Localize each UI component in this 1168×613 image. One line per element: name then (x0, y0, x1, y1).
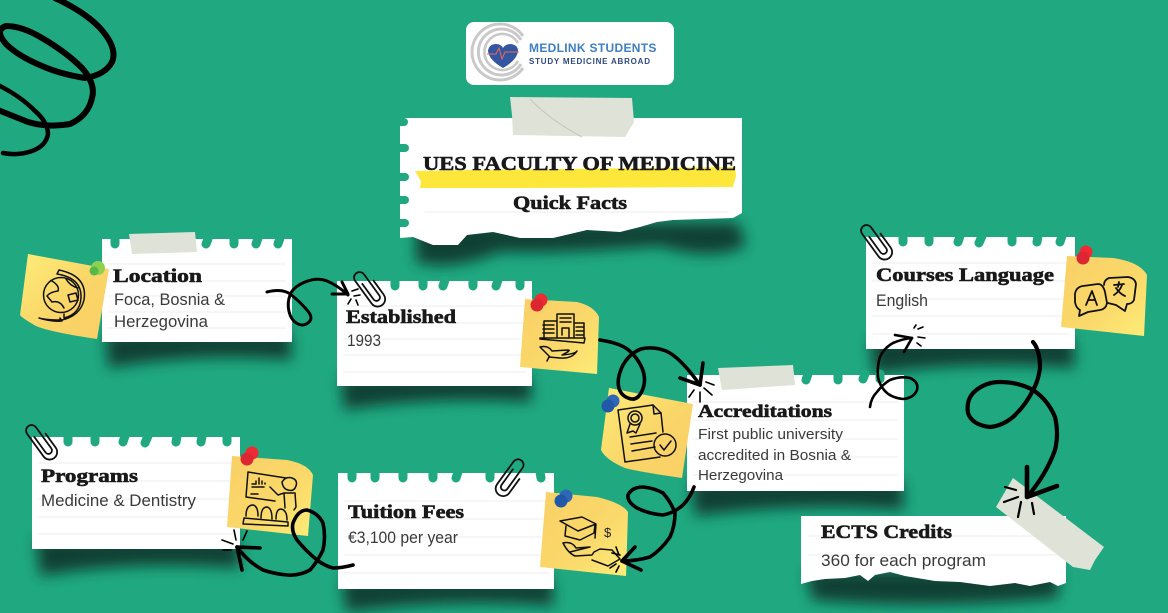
body: First public university (698, 426, 844, 443)
arrow: accreditations to tuition (610, 487, 694, 572)
heading: Programs (41, 466, 138, 487)
heading: Courses Language (876, 265, 1054, 286)
pin: red (530, 294, 548, 312)
logo background (466, 22, 674, 85)
subtitle: Quick Facts (513, 194, 627, 214)
paper (32, 437, 240, 549)
paperclip: established (352, 268, 388, 310)
heading: Tuition Fees (348, 502, 464, 523)
heading: ECTS Credits (821, 522, 952, 543)
paper (337, 281, 532, 386)
paper (102, 239, 292, 342)
logo name: MEDLINK STUDENTS (529, 41, 657, 55)
body: English (876, 292, 928, 310)
arrow: established to accreditations (600, 340, 714, 402)
arrow: accreditations to courses (870, 325, 925, 407)
card: ects credits (801, 478, 1104, 586)
card: location: Herzegovina (114, 313, 209, 331)
card: location (102, 232, 292, 342)
icon: speech bubbles (1075, 277, 1136, 316)
paper (866, 237, 1075, 349)
icon: certificate (618, 405, 676, 462)
note (520, 299, 599, 374)
paperclip: tuition fees (493, 457, 529, 499)
icon: dollar sign: $ (604, 525, 612, 540)
paperclip: courses language (859, 221, 895, 263)
sticky note: translate (1061, 246, 1147, 336)
icon: building on hand (540, 314, 585, 361)
arrow: courses to ects (968, 342, 1057, 517)
card: established (337, 280, 532, 386)
logo badge (466, 22, 674, 85)
title panel (399, 97, 742, 245)
logo tagline: STUDY MEDICINE ABROAD (529, 57, 650, 66)
yellow highlight (415, 167, 736, 188)
body: €3,100 per year (348, 529, 458, 547)
card: programs (32, 436, 240, 549)
note (20, 254, 109, 339)
heading: Established (346, 307, 457, 328)
decorative scribble (0, 0, 114, 154)
arrow: tuition to programs (222, 510, 353, 575)
pin: blue (602, 394, 620, 412)
note (540, 492, 628, 576)
logo mark: concentric rings with heart (472, 24, 523, 80)
note (227, 456, 313, 536)
note (1061, 256, 1147, 336)
tape (129, 232, 197, 254)
sticky note: certificate (601, 388, 693, 478)
pin: green (90, 261, 105, 276)
paper (687, 375, 904, 491)
icon: globe (39, 270, 84, 321)
body: Foca, Bosnia & (114, 291, 225, 309)
paperclip: programs (24, 421, 60, 463)
card: accreditations (687, 365, 904, 491)
icon: teacher and students (243, 472, 296, 526)
torn paper (400, 118, 742, 245)
body: 360 for each program (821, 551, 986, 570)
tape (510, 97, 634, 137)
arrow: location to established (267, 279, 360, 325)
card: accreditations: accredited in Bosnia & (698, 447, 851, 464)
torn paper (801, 516, 1066, 586)
pin: red (240, 446, 258, 466)
paper (338, 473, 554, 589)
heading: Location (113, 266, 203, 287)
icon: cap and hand (560, 517, 620, 566)
sticky note: globe (20, 254, 109, 339)
title: UES FACULTY OF MEDICINE (423, 153, 736, 175)
tape (996, 478, 1104, 570)
tape (718, 365, 795, 390)
card: courses language (866, 236, 1075, 349)
card: tuition fees (338, 472, 554, 589)
sticky note: classroom (227, 446, 313, 536)
card: accreditations: Herzegovina (698, 467, 784, 484)
sticky note: graduation fee (540, 490, 628, 576)
body: Medicine & Dentistry (41, 492, 197, 510)
heading: Accreditations (698, 401, 832, 421)
pin: red (1076, 246, 1092, 264)
sticky note: building (520, 294, 599, 374)
pin: blue (554, 490, 572, 508)
note (601, 388, 693, 478)
body: 1993 (347, 332, 381, 350)
